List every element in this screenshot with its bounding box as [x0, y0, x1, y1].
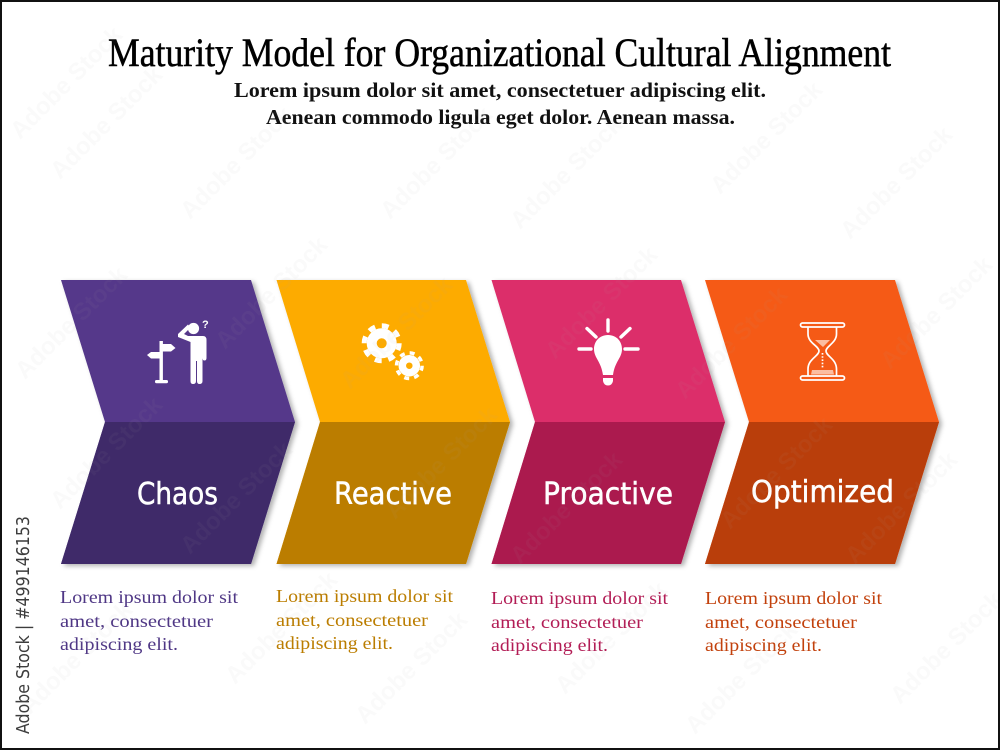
text block: Optimized description: amet, consectetuer [705, 612, 857, 632]
watermark: Adobe Stock [550, 576, 673, 699]
text block: Reactive description: amet, consectetuer [276, 610, 428, 630]
text block: Proactive description [491, 588, 668, 655]
text block: Optimized description [705, 588, 882, 655]
watermark: Adobe Stock [705, 76, 828, 199]
icon: hourglass [800, 323, 844, 380]
watermark: Adobe Stock [875, 251, 998, 374]
watermark: Adobe Stock [540, 241, 663, 364]
watermark: Adobe Stock [45, 391, 168, 514]
panel: Optimized [705, 280, 939, 564]
text block: Proactive description: adipiscing elit. [491, 635, 608, 655]
text block: Chaos description: amet, consectetuer [60, 611, 213, 631]
icon: person at signpost [147, 319, 209, 384]
watermark: Adobe Stock [15, 596, 138, 719]
watermark: Adobe Stock [680, 616, 803, 739]
watermark: Adobe Stock [210, 231, 333, 354]
text block: Reactive description: Lorem ipsum dolor sit [276, 586, 453, 606]
subtitle: Lorem ipsum dolor sit amet, consectetuer adipiscing elit. [234, 78, 766, 102]
text block: Optimized description: Lorem ipsum dolor sit [705, 588, 882, 608]
watermark: Adobe Stock [380, 401, 503, 524]
watermark: Adobe Stock [175, 436, 298, 559]
icon: gears [364, 326, 422, 379]
watermark: Adobe Stock [375, 101, 498, 224]
watermark: Adobe Stock [350, 606, 473, 729]
label: Reactive: Reactive [334, 477, 452, 512]
subtitle: Aenean commodo ligula eget dolor. Aenean massa. [266, 105, 735, 129]
panel: Proactive [492, 280, 725, 564]
label: Proactive: Proactive [543, 477, 673, 512]
text block: Proactive description: Lorem ipsum dolor sit [491, 588, 668, 608]
watermark: Adobe Stock [220, 566, 343, 689]
text block: Chaos description: Lorem ipsum dolor sit [60, 587, 238, 607]
watermark: Adobe Stock [10, 261, 133, 384]
panel: Reactive [276, 280, 510, 564]
text block: Proactive description: amet, consectetuer [491, 612, 643, 632]
stock credit: Adobe Stock | #499146153 [13, 516, 34, 734]
text block: Reactive description: adipiscing elit. [276, 633, 393, 653]
watermark: Adobe Stock [670, 281, 793, 404]
text block: Chaos description [60, 587, 238, 654]
watermark: Adobe Stock [5, 21, 128, 144]
label: Chaos: Chaos [137, 477, 218, 512]
watermark: Adobe Stock [175, 101, 298, 224]
title: Maturity Model for Organizational Cultural Alignment [108, 30, 891, 75]
text block: Reactive description [276, 586, 453, 653]
watermark: Adobe Stock [835, 121, 958, 244]
watermark: Adobe Stock [45, 61, 168, 184]
text block: Chaos description: adipiscing elit. [60, 634, 178, 654]
panel: Chaos [61, 280, 295, 564]
icon: person at signpost: ? [202, 319, 209, 331]
watermark: Adobe Stock [840, 446, 963, 569]
subtitle [234, 78, 766, 129]
label: Optimized: Optimized [751, 475, 894, 510]
watermark: Adobe Stock [505, 446, 628, 569]
watermark: Adobe Stock [715, 411, 838, 534]
watermark: Adobe Stock [335, 271, 458, 394]
watermark: Adobe Stock [505, 111, 628, 234]
text block: Optimized description: adipiscing elit. [705, 635, 822, 655]
icon: light bulb [579, 320, 638, 386]
